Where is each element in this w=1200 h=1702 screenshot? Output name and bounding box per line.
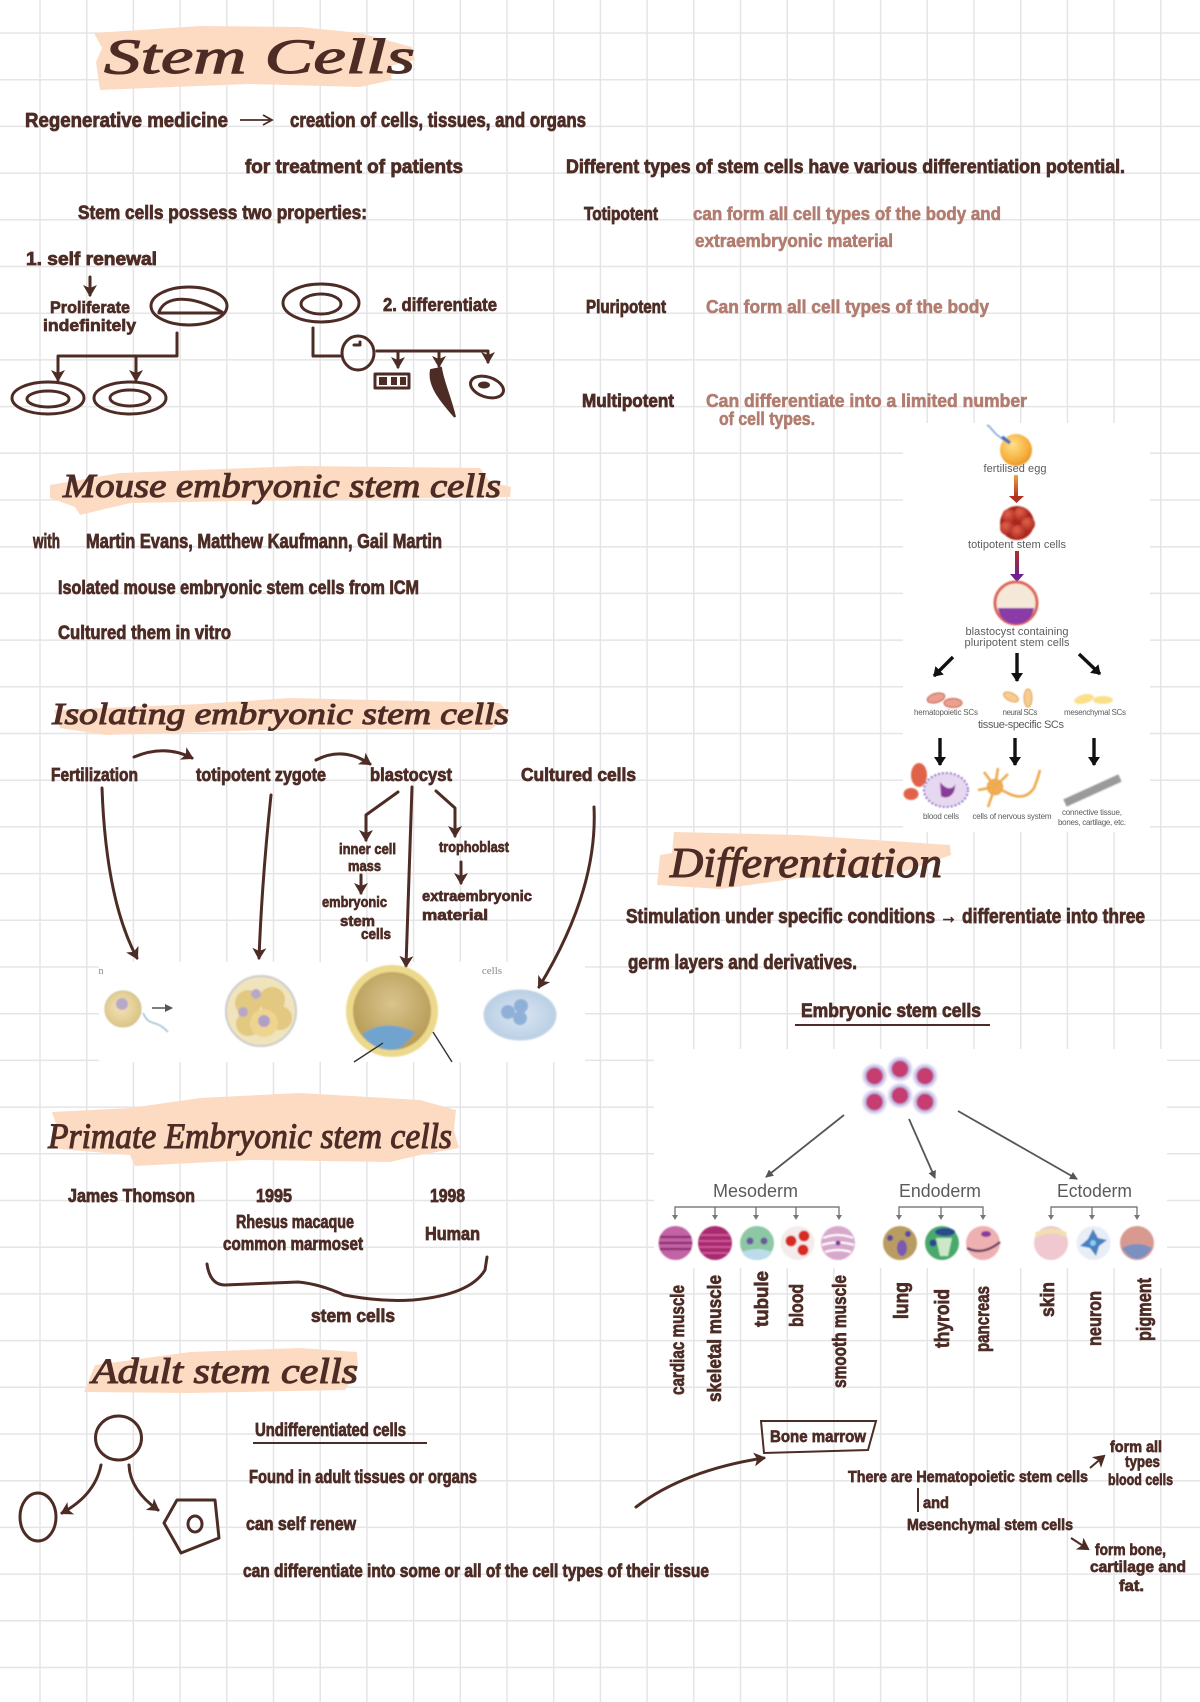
text: adult stem cell notes [243, 1420, 709, 1581]
text: primate embryonic notes: 1998 [430, 1186, 465, 1206]
icon: tissue specific stem cells [926, 689, 1113, 708]
text: differentiation notes [626, 906, 1145, 1025]
flow: isolation steps with arrows: cells [361, 926, 391, 943]
diagram: self renewal: 1. self renewal [26, 249, 157, 269]
labels: cell types: skeletal muscle [705, 1275, 726, 1402]
icon: morula [1000, 506, 1035, 540]
panel: potency definitions: Multipotent [582, 391, 674, 411]
icon: differentiated cell types [658, 1226, 1154, 1260]
labels: cell types: pigment [1134, 1278, 1156, 1341]
illustration: egg, morula, blastocyst, cultured cells: n [98, 966, 104, 977]
diagram: potency lineage flow chart: cells of nervous system [972, 812, 1052, 821]
chart: germ layer tree: Ectoderm [1057, 1181, 1132, 1201]
labels: cell types: pancreas [973, 1286, 994, 1352]
flow: isolation steps with arrows: Cultured cells [521, 765, 636, 785]
text: bone marrow stem cell notes: cartilage and [1090, 1559, 1186, 1576]
title: Stem Cells: Stem Cells [104, 28, 415, 84]
panel: potency definitions: extraembryonic material [695, 231, 893, 251]
panel: potency definitions: Can differentiate into a limited number [706, 391, 1027, 411]
heading: differentiation [657, 832, 951, 889]
diagram: adult stem cell division [20, 1416, 219, 1553]
flow: isolation steps with arrows: mass [348, 858, 381, 875]
chart: germ layer tree: Mesoderm [713, 1181, 798, 1201]
diagram: potency lineage flow chart: neural SCs [1002, 708, 1038, 717]
labels: cell types [668, 1271, 1156, 1402]
panel: potency definitions: can form all cell types of the body and [693, 204, 1001, 224]
flow: isolation steps with arrows: material [422, 907, 488, 924]
panel: potency definitions: Totipotent [584, 204, 658, 224]
panel: potency definitions: of cell types. [719, 409, 815, 429]
diagram: potency lineage flow chart: blood cells [923, 812, 959, 821]
flow: isolation steps with arrows: totipotent zygote [196, 765, 326, 785]
callout: bone marrow: Bone marrow [770, 1427, 867, 1446]
text: bone marrow stem cell notes: fat. [1119, 1578, 1144, 1595]
panel: potency definitions: Pluripotent [586, 297, 666, 317]
heading: mouse embryonic stem cells [50, 466, 511, 515]
panel: potency definitions [582, 204, 1027, 429]
heading: primate embryonic stem cells [47, 1093, 459, 1166]
diagram: potency lineage flow chart: blastocyst containing [966, 626, 1068, 638]
flow: isolation steps with arrows [51, 751, 636, 987]
text: bone marrow stem cell notes: and [923, 1495, 949, 1512]
text: bone marrow stem cell notes: There are Hematopoietic stem cells [848, 1469, 1088, 1486]
heading: isolating embryonic stem cells: Isolating embryonic stem cells [51, 696, 509, 731]
arrow: egg to totipotent [1009, 475, 1024, 503]
text: differentiation notes: germ layers and derivatives. [628, 952, 857, 974]
text: mouse discovery notes: Cultured them in vitro [58, 623, 231, 644]
diagram: self renewal [12, 249, 227, 414]
chart: germ layer tree: Endoderm [899, 1181, 981, 1201]
text: bone marrow stem cell notes: blood cells [1108, 1472, 1173, 1489]
illustration: egg, morula, blastocyst, cultured cells: cells [482, 965, 502, 977]
icon: blood cells [904, 763, 968, 807]
text: mouse discovery notes [32, 531, 442, 644]
text: adult stem cell notes: Found in adult tissues or organs [249, 1467, 477, 1487]
heading: differentiation: Differentiation [669, 841, 942, 887]
text: regenerative medicine definition: Regenerative medicine [25, 110, 228, 132]
text: regenerative medicine definition: for treatment of patients [245, 157, 463, 178]
labels: cell types: smooth muscle [830, 1275, 851, 1388]
icon: culture dish [484, 990, 556, 1040]
text: primate embryonic notes: James Thomson [68, 1186, 195, 1206]
text: different potency intro: Different types of stem cells have various differentiation potential. [566, 157, 1125, 178]
diagram: potency lineage flow chart: totipotent stem cells [968, 539, 1066, 551]
icon: bone bar [1065, 778, 1120, 803]
flow: isolation steps with arrows: stem [340, 913, 375, 930]
icon: embryonic stem cell cluster [862, 1056, 938, 1115]
diagram: self renewal: Proliferate [50, 298, 130, 317]
icon: fertilised egg [987, 425, 1032, 466]
labels: cell types: lung [891, 1282, 913, 1319]
chart: germ layer tree [658, 1056, 1156, 1402]
diagram: potency lineage flow chart [904, 425, 1126, 827]
text: bone marrow stem cell notes: form all [1110, 1439, 1162, 1456]
flow: isolation steps with arrows: embryonic [322, 894, 387, 911]
text: adult stem cell notes: can differentiate into some or all of the cell types of their tissue [243, 1561, 709, 1581]
text: bone marrow stem cell notes: Mesenchymal stem cells [907, 1517, 1073, 1534]
diagram: potency lineage flow chart: hematopoietic SCs [914, 708, 978, 717]
icon: blastocyst section [346, 965, 438, 1057]
text: mouse discovery notes: with [32, 531, 60, 553]
title: Stem Cells [94, 26, 415, 90]
text: regenerative medicine definition: creation of cells, tissues, and organs [290, 110, 586, 132]
text: primate embryonic notes: common marmoset [223, 1234, 363, 1254]
heading: mouse embryonic stem cells: Mouse embryonic stem cells [62, 468, 501, 505]
flow: isolation steps with arrows: extraembryonic [422, 888, 532, 905]
text: primate embryonic notes: stem cells [311, 1306, 395, 1326]
text: adult stem cell notes: can self renew [246, 1514, 357, 1534]
labels: cell types: blood [787, 1284, 808, 1327]
flow: isolation steps with arrows: trophoblast [439, 839, 509, 856]
icon: blastocyst [995, 582, 1037, 624]
labels: cell types: neuron [1085, 1291, 1106, 1346]
text: differentiation notes: Embryonic stem cells [801, 1001, 981, 1022]
diagram: potency lineage flow chart: pluripotent stem cells [964, 637, 1070, 649]
icon: egg [105, 991, 168, 1032]
icon: morula [226, 976, 296, 1046]
diagram: potency lineage flow chart: bones, cartilage, etc. [1058, 818, 1126, 827]
heading: primate embryonic stem cells: Primate Embryonic stem cells [47, 1116, 452, 1156]
labels: cell types: skin [1038, 1282, 1059, 1317]
labels: cell types: tubule [752, 1271, 773, 1327]
illustration: egg, morula, blastocyst, cultured cells [98, 965, 556, 1062]
text: bone marrow stem cell notes: form bone, [1095, 1542, 1166, 1559]
arrow: totipotent to blastocyst [1010, 551, 1024, 582]
text: mouse discovery notes: Isolated mouse embryonic stem cells from ICM [58, 578, 419, 599]
diagram: differentiate [283, 284, 506, 417]
heading: adult stem cells: Adult stem cells [90, 1351, 358, 1391]
diagram: potency lineage flow chart: mesenchymal SCs [1064, 708, 1126, 717]
arrow: to bone marrow [636, 1458, 764, 1507]
callout: bone marrow [761, 1421, 876, 1453]
diagram: self renewal: indefinitely [43, 316, 137, 335]
text: primate embryonic notes: Rhesus macaque [236, 1212, 354, 1232]
text: two properties: Stem cells possess two properties: [78, 203, 367, 224]
text: adult stem cell notes: Undifferentiated cells [255, 1420, 406, 1440]
panel: potency definitions: Can form all cell types of the body [706, 297, 989, 317]
flow: isolation steps with arrows: inner cell [339, 841, 396, 858]
diagram: potency lineage flow chart: fertilised egg [984, 463, 1046, 475]
text: primate embryonic notes: Human [425, 1224, 480, 1244]
flow: isolation steps with arrows: Fertilization [51, 765, 138, 785]
text: bone marrow stem cell notes: types [1125, 1454, 1160, 1471]
text: bone marrow stem cell notes [848, 1439, 1186, 1595]
text: regenerative medicine definition [25, 110, 586, 178]
diagram: potency lineage flow chart: tissue-specific SCs [978, 719, 1064, 731]
flow: isolation steps with arrows: blastocyst [370, 765, 452, 785]
text: primate embryonic notes [68, 1186, 487, 1326]
icon: neuron [978, 768, 1040, 807]
text: primate embryonic notes: 1995 [256, 1186, 292, 1206]
diagram: potency lineage flow chart: connective tissue, [1062, 808, 1122, 817]
labels: cell types: thyroid [932, 1289, 954, 1348]
diagram: differentiate: 2. differentiate [383, 295, 497, 315]
text: mouse discovery notes: Martin Evans, Matthew Kaufmann, Gail Martin [86, 531, 442, 553]
labels: cell types: cardiac muscle [668, 1285, 689, 1395]
